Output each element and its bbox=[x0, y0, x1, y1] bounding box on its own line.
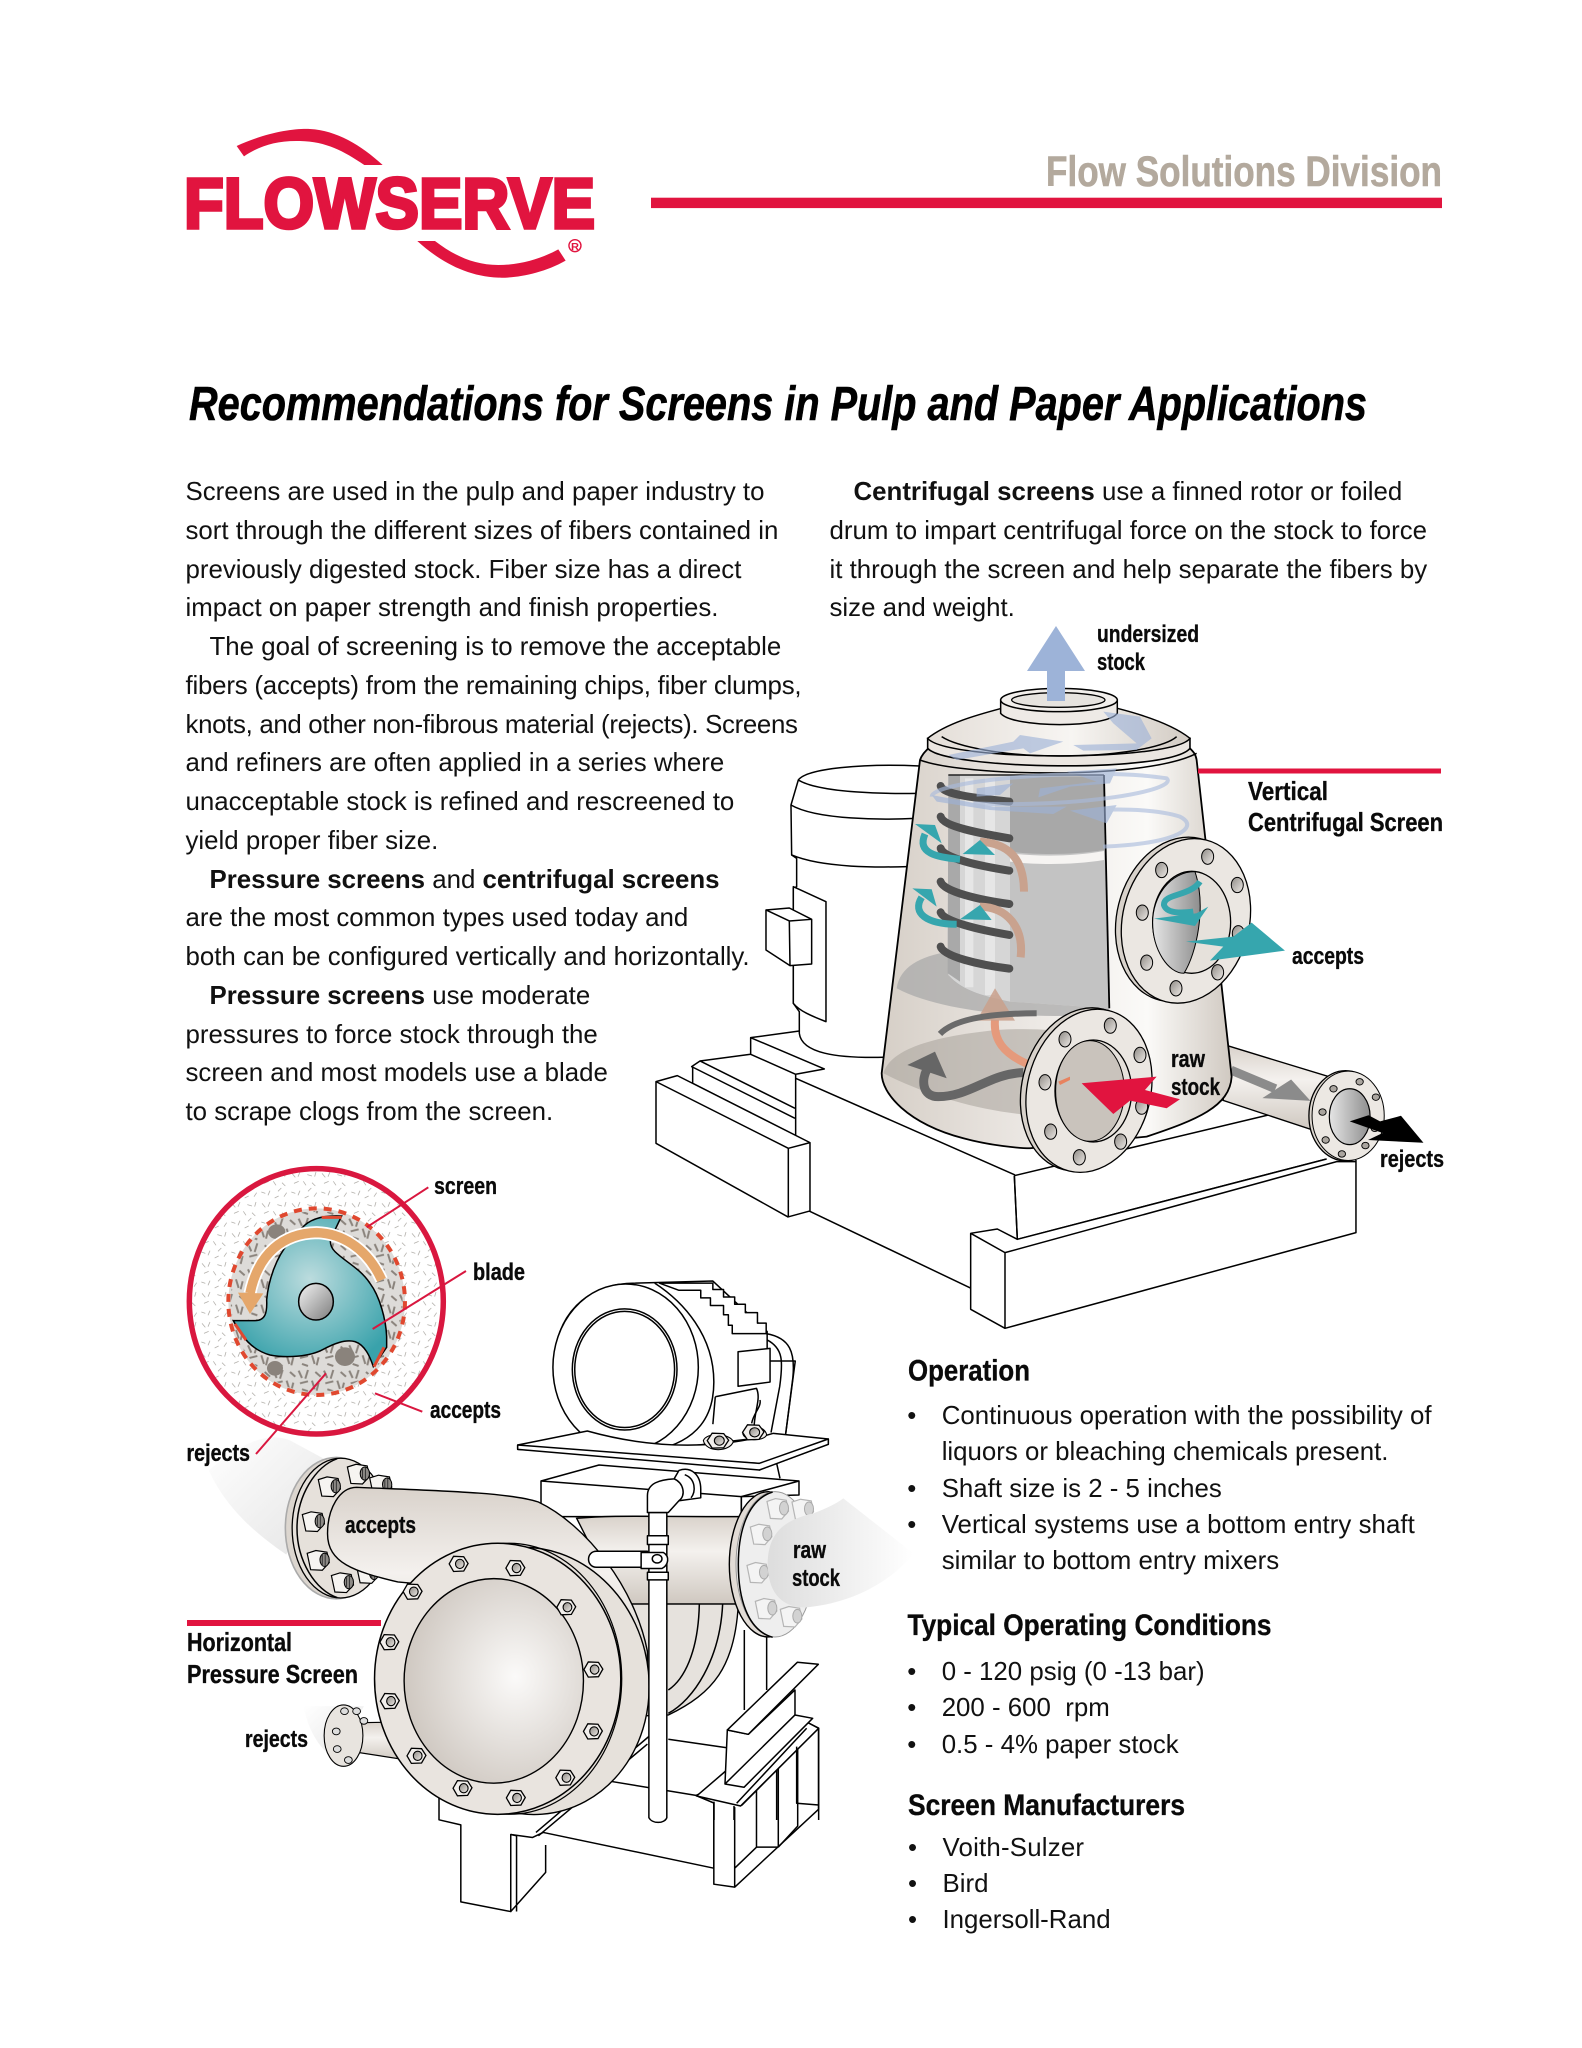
intro text left column: The goal of screening is to remove the acceptable bbox=[210, 633, 781, 661]
intro text left column: are the most common types used today and bbox=[186, 904, 688, 932]
section headings bbox=[908, 1354, 1272, 1822]
intro text left column: Pressure screens use moderate bbox=[210, 982, 590, 1010]
accepts flow wash bbox=[209, 1437, 330, 1555]
list: screen manufacturers: Voith-Sulzer bbox=[942, 1834, 1084, 1862]
inset labels: blade bbox=[473, 1259, 525, 1286]
salmon flow arrows bbox=[980, 842, 1024, 957]
intro text right column bbox=[830, 478, 1428, 622]
division name: Flow Solutions Division bbox=[1046, 148, 1442, 196]
horizontal screen labels: raw bbox=[793, 1537, 826, 1564]
inset labels bbox=[186, 1173, 525, 1467]
inset labels: accepts bbox=[430, 1397, 501, 1424]
list: operation: Continuous operation with the possibility of bbox=[942, 1402, 1432, 1430]
inner drum bbox=[948, 775, 1109, 1008]
horizontal screen labels: stock bbox=[792, 1565, 840, 1592]
list: screen manufacturers: • bbox=[908, 1906, 917, 1934]
intro text left column: unacceptable stock is refined and rescreened to bbox=[186, 788, 734, 816]
rejects flange bbox=[1309, 1071, 1382, 1161]
outer ring bbox=[189, 1169, 443, 1434]
vessel body with cutaway bbox=[882, 688, 1285, 1186]
intro text right column: size and weight. bbox=[830, 594, 1015, 622]
inset: blade detail circle bbox=[186, 1169, 525, 1467]
swirl and accepts exit arrow bbox=[1164, 882, 1200, 913]
vertical screen labels: undersized bbox=[1097, 621, 1199, 648]
list: screen manufacturers: • bbox=[908, 1870, 917, 1898]
screen zone bbox=[228, 1208, 405, 1395]
intro text left column: knots, and other non-fibrous material (rejects). Screens bbox=[186, 711, 798, 739]
vertical screen labels bbox=[1097, 621, 1444, 1173]
intro text left column: previously digested stock. Fiber size has a direct bbox=[186, 556, 741, 584]
undersized stock arrow bbox=[1027, 626, 1085, 701]
horizontal screen labels: accepts bbox=[345, 1512, 416, 1539]
bracket bbox=[697, 1715, 819, 1806]
list: typical operating conditions: • bbox=[907, 1658, 916, 1686]
logo: Flowserve: FLOWSERVE bbox=[184, 165, 595, 244]
diagonal brace bbox=[536, 1736, 650, 1836]
upper flange bbox=[1099, 823, 1268, 1017]
blade tip wear strips bbox=[235, 1217, 384, 1367]
list: screen manufacturers: Ingersoll-Rand bbox=[942, 1906, 1111, 1934]
intro text left column: Pressure screens and centrifugal screens bbox=[210, 866, 720, 894]
list: operation: similar to bottom entry mixers bbox=[942, 1547, 1279, 1575]
inset disc bbox=[189, 1169, 443, 1434]
list: screen manufacturers: Bird bbox=[942, 1870, 988, 1898]
vertical screen labels: raw bbox=[1171, 1046, 1205, 1073]
front plinth bbox=[971, 1115, 1356, 1328]
vertical screen labels: rejects bbox=[1380, 1146, 1444, 1173]
plate and bottom sump bbox=[897, 952, 1109, 1016]
vertical screen labels: stock bbox=[1171, 1074, 1221, 1101]
dark recirculation arrows bbox=[924, 1070, 1023, 1097]
list: typical operating conditions bbox=[907, 1658, 1205, 1759]
intro text right column: Centrifugal screens use a finned rotor or foiled bbox=[854, 478, 1402, 506]
section headings: Typical Operating Conditions bbox=[908, 1609, 1272, 1642]
intro text left column: impact on paper strength and finish properties. bbox=[186, 594, 718, 622]
inset labels: screen bbox=[434, 1173, 497, 1200]
list: operation: • bbox=[907, 1511, 916, 1539]
list: typical operating conditions: • bbox=[907, 1731, 916, 1759]
illustration: vertical centrifugal screen bbox=[656, 621, 1444, 1328]
list: operation: • bbox=[907, 1475, 916, 1503]
list: typical operating conditions: 200 - 600 rpm bbox=[942, 1694, 1110, 1722]
intro text left column: both can be configured vertically and horizontally. bbox=[186, 943, 750, 971]
rejects arrow bbox=[1350, 1115, 1423, 1143]
main head bbox=[375, 1543, 621, 1814]
accepts pipe bbox=[328, 1487, 647, 1702]
main rear rim bbox=[395, 1538, 662, 1823]
horizontal screen labels: Pressure Screen bbox=[187, 1659, 358, 1689]
list: operation: Vertical systems use a bottom entry shaft bbox=[942, 1511, 1415, 1539]
list: operation: liquors or bleaching chemicals present. bbox=[942, 1438, 1388, 1466]
frame and legs bbox=[439, 1744, 714, 1912]
intro text left column bbox=[186, 478, 801, 1126]
intro text left column: fibers (accepts) from the remaining chips, fiber clumps, bbox=[186, 672, 801, 700]
rejects pipe bbox=[1223, 1046, 1330, 1130]
illustration: horizontal pressure screen bbox=[187, 1281, 913, 1912]
horizontal screen title rule bbox=[187, 1620, 381, 1626]
lid bbox=[928, 738, 1190, 766]
list: operation bbox=[907, 1402, 1432, 1575]
fibre clumps bbox=[267, 1224, 355, 1376]
horizontal screen labels bbox=[187, 1512, 840, 1753]
section headings: Operation bbox=[908, 1354, 1030, 1388]
motor and base line art bbox=[656, 765, 1015, 1288]
right flange bbox=[729, 1492, 807, 1637]
cross pipe bbox=[577, 1516, 740, 1604]
intro text left column: pressures to force stock through the bbox=[186, 1021, 598, 1049]
standpipe with valve bbox=[649, 1513, 667, 1822]
small rejects nozzle bbox=[303, 1706, 364, 1761]
logo: Flowserve: R bbox=[571, 242, 580, 253]
list: screen manufacturers bbox=[908, 1834, 1111, 1934]
header rule bbox=[651, 198, 1442, 208]
teal accepts arrows bbox=[919, 834, 960, 924]
raw stock flow wash bbox=[768, 1498, 913, 1607]
vertical screen labels: Centrifugal Screen bbox=[1248, 807, 1443, 837]
rotor hub bbox=[299, 1283, 333, 1320]
list: typical operating conditions: • bbox=[907, 1694, 916, 1722]
motor plate bbox=[518, 1431, 828, 1470]
vertical screen labels: stock bbox=[1097, 649, 1145, 676]
helical coil bbox=[941, 786, 1009, 969]
intro text left column: screen and most models use a blade bbox=[186, 1059, 608, 1087]
lower flange bbox=[1004, 994, 1169, 1186]
list: operation: • bbox=[907, 1402, 916, 1430]
inset labels: rejects bbox=[186, 1440, 250, 1467]
vertical screen labels: Vertical bbox=[1248, 776, 1328, 806]
section headings: Screen Manufacturers bbox=[908, 1789, 1185, 1822]
vertical screen labels: accepts bbox=[1292, 943, 1364, 970]
list: operation: Shaft size is 2 - 5 inches bbox=[942, 1475, 1222, 1503]
intro text left column: and refiners are often applied in a series where bbox=[186, 749, 724, 777]
intro text left column: yield proper fiber size. bbox=[186, 827, 438, 855]
raw stock arrow bbox=[1082, 1077, 1180, 1114]
intro text right column: drum to impart centrifugal force on the stock to force bbox=[830, 517, 1427, 545]
list: screen manufacturers: • bbox=[908, 1834, 917, 1862]
motor bbox=[554, 1281, 795, 1450]
blue swirl arrows bbox=[932, 712, 1187, 847]
horizontal screen labels: rejects bbox=[245, 1726, 308, 1753]
support column bbox=[744, 1630, 767, 1710]
intro text left column: to scrape clogs from the screen. bbox=[186, 1098, 553, 1126]
list: typical operating conditions: 0.5 - 4% paper stock bbox=[942, 1731, 1179, 1759]
rear bowl bbox=[607, 1604, 738, 1717]
accepts flange bbox=[285, 1457, 387, 1599]
intro text left column: Screens are used in the pulp and paper industry to bbox=[186, 478, 764, 506]
intro text right column: it through the screen and help separate the fibers by bbox=[830, 556, 1427, 584]
logo: Flowserve bbox=[184, 129, 595, 278]
leader lines bbox=[256, 1187, 466, 1454]
intro text left column: sort through the different sizes of fibers contained in bbox=[186, 517, 778, 545]
callout rule bbox=[1198, 768, 1441, 774]
list: typical operating conditions: 0 - 120 psig (0 -13 bar) bbox=[942, 1658, 1205, 1686]
blade bbox=[233, 1216, 387, 1367]
rotation arrow bbox=[250, 1233, 382, 1293]
pedestal bbox=[541, 1465, 799, 1517]
title: Recommendations for Screens in Pulp and Paper Applications bbox=[189, 378, 1367, 431]
horizontal screen labels: Horizontal bbox=[187, 1627, 292, 1657]
